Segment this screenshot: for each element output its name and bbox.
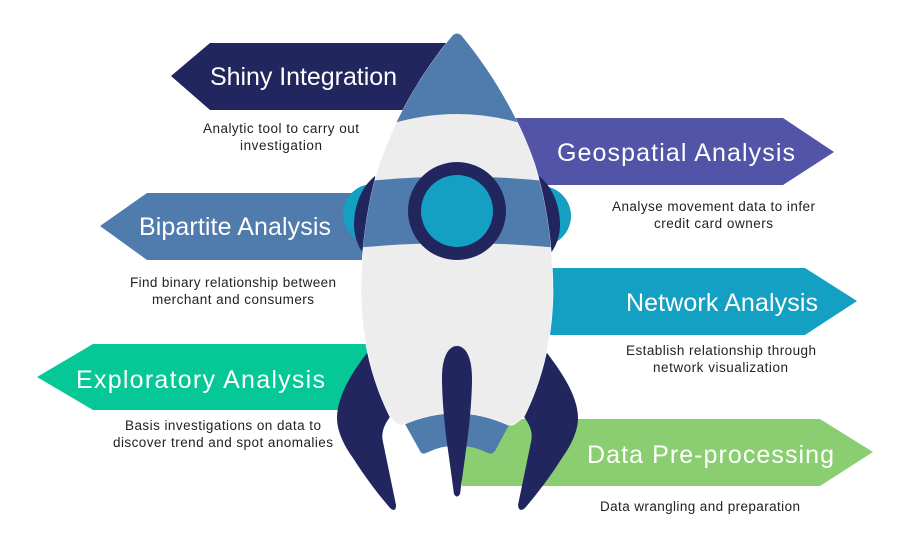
nozzle: [405, 413, 509, 454]
panel: Shiny Integration: investigation: [240, 138, 322, 153]
panel: Bipartite Analysis: [100, 193, 380, 307]
panel: Bipartite Analysis: merchant and consumers: [152, 292, 314, 307]
side boosters: [343, 176, 571, 253]
nose cone: [396, 34, 518, 122]
body band: [355, 176, 560, 248]
panel: Network Analysis: Network Analysis: [626, 289, 818, 317]
panel: Data Pre-processing: [462, 419, 873, 514]
centre fin: [442, 346, 472, 496]
icon: rocket: [337, 20, 578, 510]
panel: Exploratory Analysis: Basis investigations on data to: [125, 418, 321, 433]
panel: Exploratory Analysis: Exploratory Analysis: [76, 366, 325, 394]
porthole: [408, 162, 506, 260]
panel: Geospatial Analysis: credit card owners: [654, 216, 773, 231]
panel: Geospatial Analysis: [500, 118, 834, 231]
lower fins: [337, 353, 578, 510]
panel: Shiny Integration: Shiny Integration: [210, 63, 397, 91]
panel: Bipartite Analysis: Bipartite Analysis: [139, 213, 331, 241]
panel: Exploratory Analysis: discover trend and spot anomalies: [113, 435, 333, 450]
panel: Data Pre-processing: Data Pre-processing: [587, 441, 834, 469]
panel: Data Pre-processing: Data wrangling and preparation: [600, 499, 800, 514]
panel: Geospatial Analysis: Geospatial Analysis: [557, 139, 795, 167]
panel: Network Analysis: [530, 268, 857, 375]
panel: Shiny Integration: [171, 43, 460, 153]
panel: Exploratory Analysis: [37, 344, 380, 450]
panel: Bipartite Analysis: Find binary relationship between: [130, 275, 336, 290]
panel: Network Analysis: network visualization: [653, 360, 788, 375]
panel: Shiny Integration: Analytic tool to carry out: [203, 121, 359, 136]
panel: Geospatial Analysis: Analyse movement data to infer: [612, 199, 816, 214]
rocket body: [361, 34, 553, 425]
panel: Network Analysis: Establish relationship through: [626, 343, 816, 358]
